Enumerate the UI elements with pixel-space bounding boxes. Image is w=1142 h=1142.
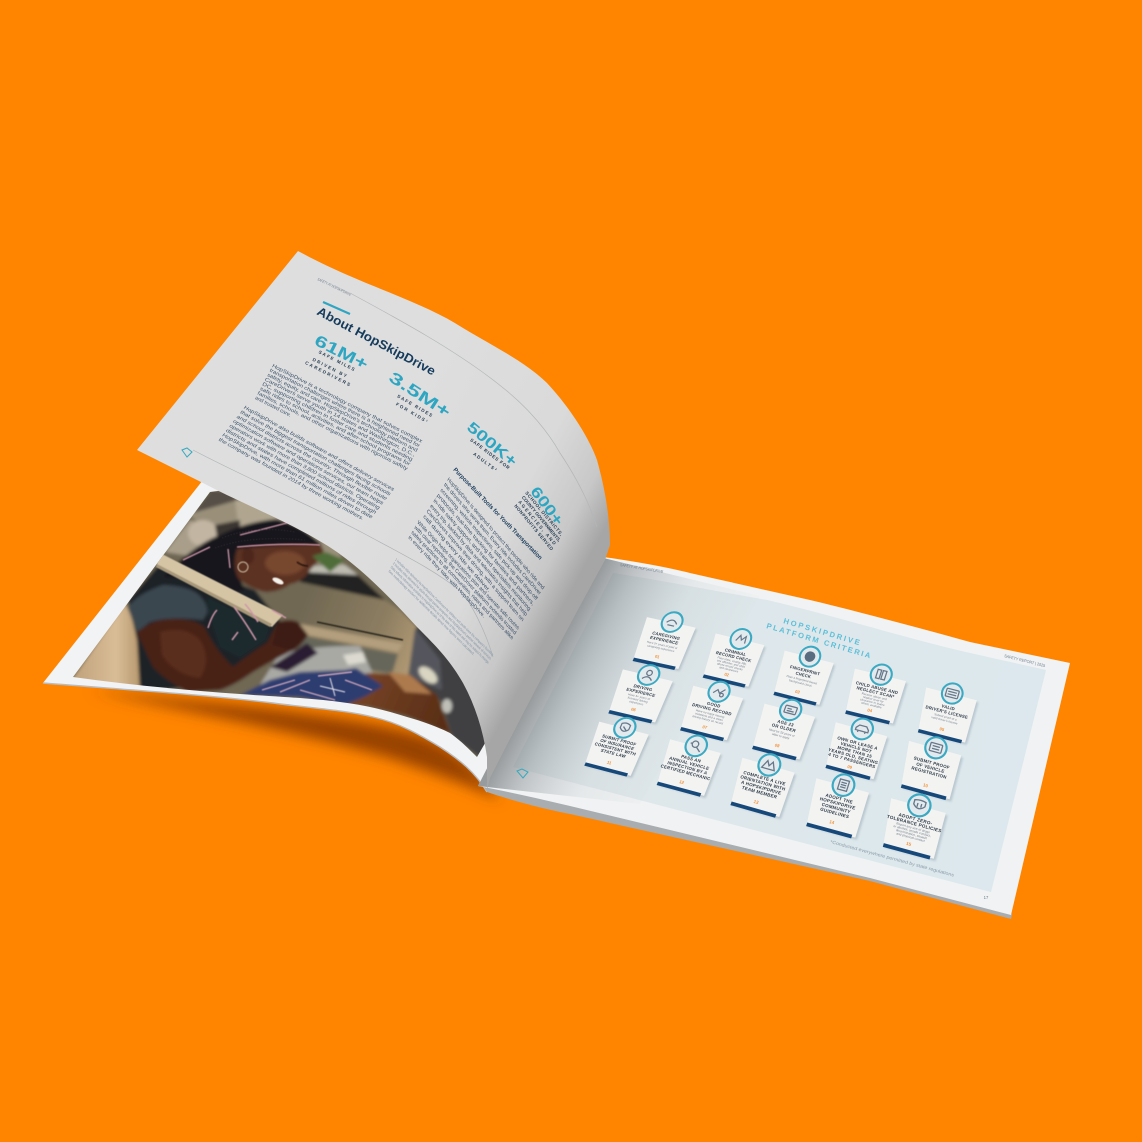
card heading: CHILD ABUSE AND	[855, 680, 899, 695]
icon: criminal record	[727, 627, 754, 651]
stat: 500K+: 500K+	[463, 419, 521, 470]
icon: vehicle	[849, 716, 876, 742]
paragraph: purpose-built closing: in every ride they take with HopSkipDrive.	[407, 535, 486, 620]
card body: Pass state, county, FBI,	[717, 655, 748, 666]
card heading: ADOPT ZERO-	[898, 812, 933, 826]
paragraph: purpose-built tools: in-ride safety support, and trained specialists monitoring	[432, 498, 531, 613]
right page	[478, 556, 1070, 915]
title: platform criteria: HOPSKIPDRIVE	[782, 616, 861, 647]
stat: 61M+: 61M+	[311, 332, 371, 374]
footnotes: See methodology section for additional details about how figures were calculated.	[388, 569, 475, 656]
running header: SAFETY AT HOPSKIPDRIVE	[316, 277, 353, 297]
paragraph: purpose-built tools: CareDrivers improve their driving, with a support team on	[425, 508, 525, 623]
paragraph: purpose-built tools: call during every ride we deliver.	[422, 514, 491, 594]
running header left: SAFETY AT HOPSKIPDRIVE	[620, 562, 664, 574]
card body: Pass a fingerprint-based	[786, 674, 818, 686]
stat: 600+	[513, 484, 567, 552]
card heading: GUIDELINES	[820, 807, 850, 819]
icon: driver	[635, 663, 663, 687]
card 13	[726, 747, 801, 819]
card heading: FINGERPRINT	[789, 664, 821, 677]
footnotes: 1 Includes rides delivered by HopSkipDrive CareDrivers for children and youth since the company's founding.	[394, 557, 494, 657]
card number: 04	[867, 707, 873, 713]
card body: where available	[861, 701, 883, 710]
card body: valid driver's license	[931, 715, 958, 726]
card heading: YEARS OLD, SEATING	[828, 747, 879, 765]
top curled page	[137, 251, 610, 790]
card heading: VEHICLE NOT	[840, 741, 873, 754]
card heading: PASS AN	[680, 754, 702, 764]
card 05	[913, 677, 982, 745]
card heading: NEGLECT SCAN*	[856, 685, 895, 699]
paragraph: about software: districts and states have completed millions of rides through	[224, 428, 378, 516]
card body: Report any use of drugs	[896, 821, 931, 834]
card body: discrimination, assault	[895, 828, 927, 840]
paragraph: purpose-built tools: HopSkipDrive is designed to protect the people who ride and	[446, 477, 545, 592]
icon: driving record	[705, 680, 733, 704]
card body: background check	[789, 678, 813, 688]
card body: neglect scan for	[862, 695, 884, 704]
top rule	[350, 293, 597, 527]
card heading: DRIVING	[633, 683, 654, 692]
paragraph: about software: optimization software and operations services, our team helps	[231, 419, 385, 507]
card 07	[676, 676, 750, 742]
card number: 10	[922, 782, 929, 789]
running header right: SAFETY REPORT | 2025	[1004, 653, 1046, 668]
paragraph: purpose-built tools: every trip, backed by data and telematics insights that help	[429, 503, 528, 618]
card heading: INSPECTION BY A	[667, 760, 709, 776]
icon: age id	[777, 697, 804, 722]
icon: registration	[923, 735, 949, 761]
card heading: OR OLDER	[771, 722, 797, 734]
panel: light blue criteria background	[513, 573, 1046, 892]
card heading: VALID	[941, 703, 956, 712]
card heading: CRIMINAL	[724, 647, 747, 657]
card heading: REGISTRATION	[911, 765, 947, 780]
card number: 13	[753, 799, 760, 805]
page sheet	[137, 251, 610, 790]
brochure	[43, 251, 1070, 919]
paragraph: purpose-built closing: with clear reporting, the CareDriver platform extends trusted	[413, 525, 517, 637]
icon: insurance	[611, 716, 639, 740]
stat: 61M+: SAFE MILES	[318, 349, 356, 372]
card body: or alcohol; unsafe conduct,	[893, 824, 932, 838]
icon: child abuse scan	[868, 662, 894, 687]
card body: Receive abuse and	[861, 691, 888, 701]
heading: purpose-built tools: Purpose-Built Tools for Youth Transportation	[452, 467, 543, 562]
card heading: DRIVER'S LICENSE	[925, 704, 969, 720]
page number: 17	[984, 895, 989, 900]
book shadow	[90, 690, 500, 800]
paragraph: purpose-built tools: protocols, real-time tracking for families and partners,	[436, 493, 535, 607]
card heading: OWN OR LEASE A	[837, 735, 879, 751]
card body: clearance in states	[860, 697, 886, 707]
stat: 600+: NONPROFITS SERVED	[513, 503, 555, 552]
card 10	[896, 730, 967, 802]
card body: Have 5+ years of paid or	[646, 640, 678, 650]
left page with photo border	[43, 480, 530, 792]
card heading: SUBMIT PROOF	[601, 733, 637, 747]
card 09	[821, 712, 893, 782]
card heading: CAREGIVING	[651, 630, 682, 641]
card body: Have no major moving	[695, 708, 726, 719]
card 02	[698, 623, 771, 689]
card 11	[580, 712, 656, 778]
heading: About HopSkipDrive: About HopSkipDrive	[315, 304, 438, 378]
card heading: EXPERIENCE	[649, 635, 679, 646]
card heading: SUBMIT PROOF	[913, 755, 950, 770]
card heading: MORE THAN 15	[837, 745, 873, 759]
card body: Must be 23 years or	[769, 727, 796, 738]
paragraph: about intro: CareDrivers serve youth in 14 states and Washington, D.C.,	[263, 377, 416, 458]
stat: 61M+: DRIVEN BY	[312, 357, 348, 378]
page edge under left page	[43, 683, 487, 792]
card number: 14	[829, 819, 835, 825]
icon: fingerprint	[797, 645, 823, 669]
card 01	[628, 607, 703, 671]
card body: sex offender, and child	[716, 658, 746, 669]
bottom rule	[193, 450, 493, 657]
footnote: *Conducted everywhere permitted by state regulations	[830, 839, 955, 878]
card heading: EXPERIENCE	[626, 687, 656, 698]
paragraph: about intro: safety, equity, and care. HopSkipDrive's technology platform and	[266, 372, 418, 454]
card heading: ANNUAL VEHICLE	[668, 756, 710, 771]
paragraph: about software: and school districts across the country. Through flexible route	[235, 414, 388, 502]
paragraph: about software: the company was founded in 2014 by three working mothers.	[217, 437, 365, 522]
card heading: GOOD	[706, 701, 722, 709]
card heading: ORIENTATION WITH	[740, 774, 786, 792]
stat: 500K+	[463, 419, 521, 472]
card heading: CONSISTENT WITH	[594, 741, 637, 757]
card number: 06	[630, 707, 637, 712]
card body: violations and a clean	[694, 711, 724, 722]
card number: 15	[906, 841, 912, 847]
paragraph: about intro: HopSkipDrive is a technology company that solves complex	[271, 363, 424, 445]
icon: caregiving	[658, 610, 686, 634]
stat: 600+: AGENCIES, AND	[517, 499, 557, 546]
card body: experience	[629, 699, 645, 706]
card heading: COMPLETE A LIVE	[743, 770, 787, 787]
card heading: A HOPSKIPDRIVE	[740, 780, 782, 796]
card number: 11	[606, 760, 613, 766]
card 14	[802, 767, 875, 840]
card number: 09	[847, 764, 853, 770]
stat: 3.5M+: 3.5M+	[385, 369, 453, 421]
card number: 01	[654, 654, 661, 660]
paragraph: about intro: families, schools, and other organizations with rigorous safety	[256, 391, 409, 472]
stat: 61M+	[304, 332, 371, 387]
stat: 500K+: ADULTS²	[472, 451, 498, 472]
card body: driving history on record	[692, 714, 724, 726]
paragraph: about intro	[254, 363, 424, 477]
spine shading	[478, 556, 760, 804]
paragraph: about intro: DC, supporting children in foster care and students needing	[261, 381, 414, 463]
footnotes: 2 Includes rides delivered for adults through partner programs and HopSkipDrive's partner network of services.	[392, 561, 492, 661]
paragraph: about software: operators work with more than 3,800 school districts. Operating	[228, 423, 381, 511]
card 04	[841, 658, 912, 726]
card body: caregiving experience	[647, 643, 676, 653]
paragraph: about intro: transportation challenges where there is a heightened need for	[268, 368, 421, 449]
paragraph: about software	[217, 405, 396, 525]
paragraph: purpose-built closing: While Origin helps organizations plan and operate safe routes	[416, 520, 520, 632]
stat: 600+: COUNTY GOVERNMENTS,	[521, 495, 562, 543]
card heading: RECORD CHECK	[715, 650, 752, 663]
stat: 61M+: CAREDRIVERS	[304, 360, 351, 387]
paragraph: about intro: safe rides to school, activities, and after-school programs for	[259, 386, 411, 468]
card body: older to apply	[771, 732, 791, 740]
card 08	[748, 693, 822, 762]
card heading: TEAM MEMBER	[741, 785, 778, 800]
card heading: STATE LAW	[600, 748, 628, 759]
card body: licensed driving	[627, 696, 649, 704]
stat: 600+: 600+	[527, 484, 567, 529]
card 15	[878, 787, 952, 861]
stat: 500K+: SAFE RIDES FOR	[469, 437, 511, 471]
paragraph: purpose-built closing: safety practices to all communities, riders and partners alike	[410, 530, 514, 642]
card heading: TOLERANCE POLICIES	[886, 814, 942, 834]
card 03	[769, 641, 840, 707]
page sheet	[478, 556, 1070, 915]
card heading: ADOPT THE	[825, 793, 854, 805]
stat: 3.5M+	[385, 369, 453, 424]
footnotes: Data reflects information available to HopSkipDrive as of the date of this report and may be subject to change.	[390, 565, 490, 665]
photo: girl fastening seatbelt	[73, 490, 485, 757]
card number: 03	[794, 689, 801, 695]
accent bar	[323, 302, 350, 314]
card body: and physical contact	[896, 831, 925, 843]
stat: 3.5M+: FOR KIDS¹	[395, 402, 429, 424]
icon: footer logo	[517, 769, 528, 778]
card number: 05	[939, 726, 946, 732]
icon: zero tolerance	[906, 792, 933, 819]
card heading: HOPSKIPDRIVE	[819, 796, 856, 811]
icon: footer logo	[182, 448, 192, 457]
card heading: AGE 23	[777, 719, 795, 728]
paragraph: purpose-built tools: screening, vehicle inspections, safe pick-up and drop-off	[439, 487, 539, 603]
icon: guidelines	[830, 772, 857, 798]
card body: and clearances	[719, 665, 739, 674]
card heading: CERTIFIED MECHANIC	[660, 763, 712, 782]
book page edges	[482, 783, 1012, 919]
icon: orientation	[755, 752, 783, 778]
card number: 07	[702, 724, 709, 730]
stat: 3.5M+: SAFE RIDES	[396, 394, 433, 418]
card heading: OF INSURANCE	[599, 738, 635, 751]
stat: 600+: SCHOOL DISTRICTS,	[524, 490, 564, 537]
card heading: 4 TO 7 PASSENGERS	[828, 752, 876, 769]
card number: 12	[679, 779, 686, 785]
card heading: CHECK	[795, 671, 812, 679]
paragraph: about software: HopSkipDrive, with more than 61 million miles driven to date	[220, 433, 374, 520]
card 12	[652, 729, 728, 798]
icon: license	[939, 681, 965, 706]
paragraph: about software: HopSkipDrive also builds software and offers delivery services	[242, 405, 396, 493]
paragraph: about intro: and trusted care.	[254, 395, 292, 419]
card number: 02	[724, 672, 731, 678]
card body: Submit proof of a	[934, 712, 957, 722]
card heading: DRIVING RECORD	[691, 702, 733, 717]
icon: inspection	[682, 733, 710, 758]
title: platform criteria: PLATFORM CRITERIA	[765, 621, 872, 660]
card heading: OF VEHICLE	[916, 761, 945, 774]
card 06	[604, 659, 680, 725]
paragraph: purpose-built tools: the drivers who serve them. Every ride includes CareDriver	[442, 482, 542, 597]
card heading: COMMUNITY	[821, 802, 851, 815]
paragraph: purpose-built tools	[422, 477, 545, 629]
paragraph: about software: that solve the biggest transportation challenges facing schools	[238, 410, 392, 497]
card number: 08	[774, 743, 781, 749]
card body: abuse record checks	[716, 661, 744, 672]
card body: Have 5+ years of	[627, 692, 651, 701]
